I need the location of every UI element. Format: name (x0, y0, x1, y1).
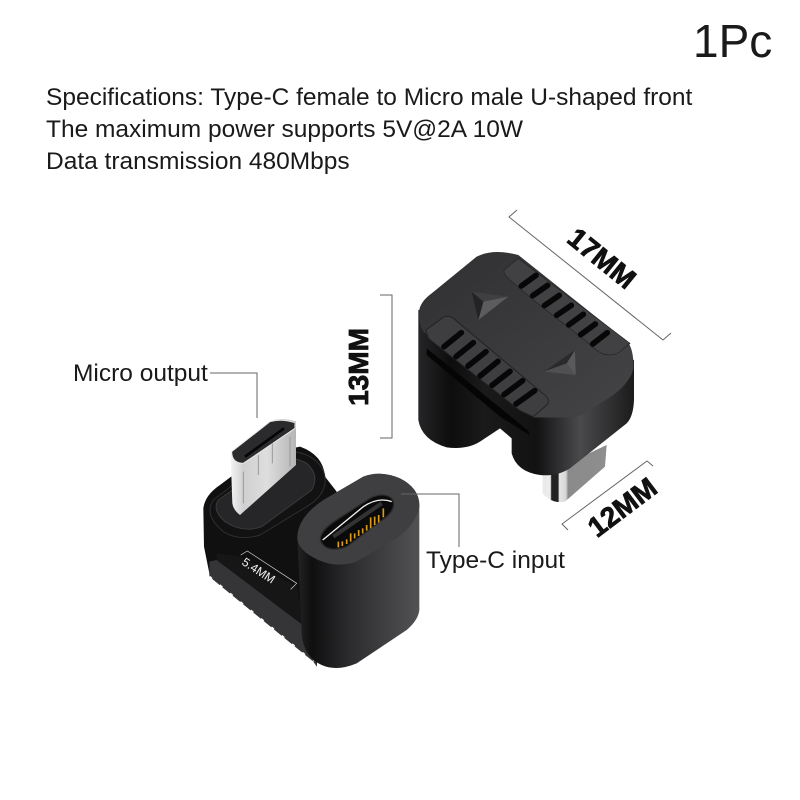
arrow: up-left (472, 292, 508, 320)
oval collar (210, 452, 325, 538)
groove (427, 348, 530, 435)
gray base face (209, 560, 317, 667)
dimension: 13MM (343, 295, 392, 438)
slots (444, 275, 607, 404)
arrow: down-right (544, 350, 576, 375)
grip: back (504, 258, 630, 355)
title: 1Pc (693, 15, 772, 67)
specifications text: Data transmission 480Mbps (46, 148, 350, 175)
label: type-c input: Type-C input (426, 547, 565, 574)
body sides (418, 310, 634, 475)
base body (203, 447, 337, 667)
dimension: 12MM: 12MM (582, 472, 663, 543)
label: micro output: Micro output (73, 360, 208, 387)
5.4mm label: 5.4MM (239, 555, 278, 586)
adapter: rear view (418, 252, 634, 502)
type-c shell (297, 474, 419, 668)
micro plug, front (231, 419, 296, 515)
micro plug, rear (543, 445, 607, 502)
type-c port (320, 495, 394, 549)
specifications text: The maximum power supports 5V@2A 10W (46, 116, 523, 143)
specifications text: Specifications: Type-C female to Micro male U-shaped front (46, 84, 692, 111)
specifications text (46, 84, 692, 175)
grip: front (426, 316, 548, 417)
top face (419, 252, 633, 418)
leader: micro output (210, 373, 257, 418)
recess (217, 553, 305, 627)
dimension: 17MM: 17MM (562, 222, 642, 295)
dimension: 13MM: 13MM (343, 328, 374, 406)
gold contacts (338, 508, 383, 547)
grip teeth (209, 577, 313, 662)
dimension: 17MM (509, 210, 671, 340)
5.4mm label (239, 551, 297, 589)
adapter: front view (203, 419, 419, 668)
dimension: 12MM (562, 461, 663, 543)
leader: type-c input (401, 494, 459, 547)
